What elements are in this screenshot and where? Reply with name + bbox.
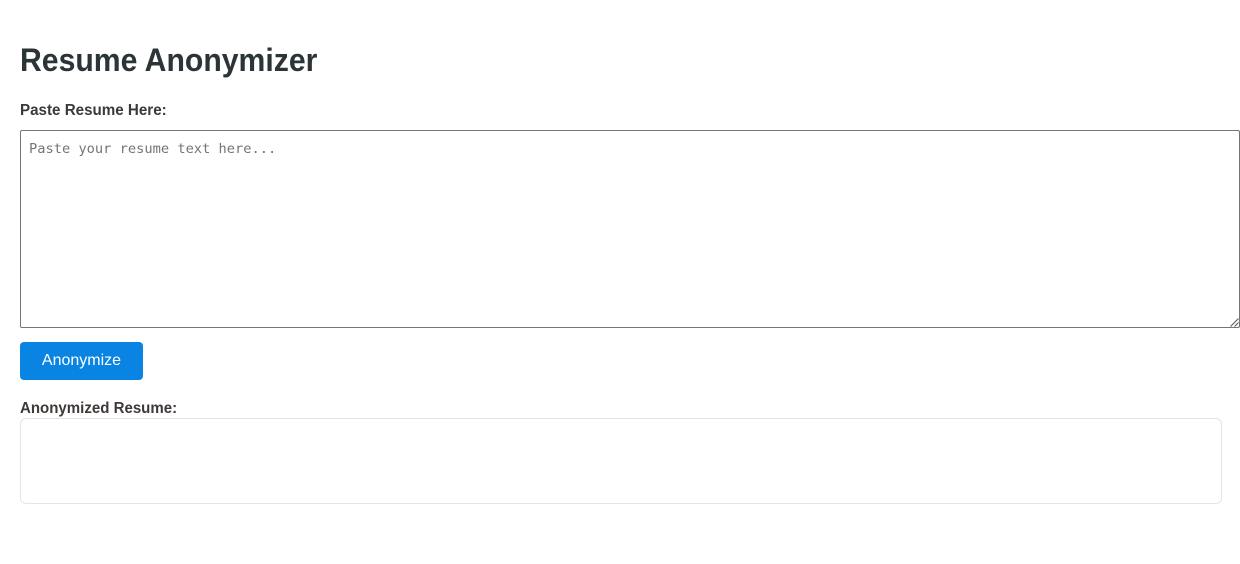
icon: resize handle	[1230, 318, 1239, 327]
label: anonymized resume: Anonymized Resume:	[20, 400, 177, 417]
label: paste resume: Paste Resume Here:	[20, 102, 167, 119]
button: anonymize	[20, 342, 143, 380]
button: anonymize: Anonymize	[42, 352, 121, 369]
title: Resume Anonymizer	[20, 42, 317, 78]
output panel	[20, 418, 1222, 504]
placeholder text: Paste your resume text here...	[29, 141, 276, 157]
input: resume text area	[20, 130, 1240, 328]
